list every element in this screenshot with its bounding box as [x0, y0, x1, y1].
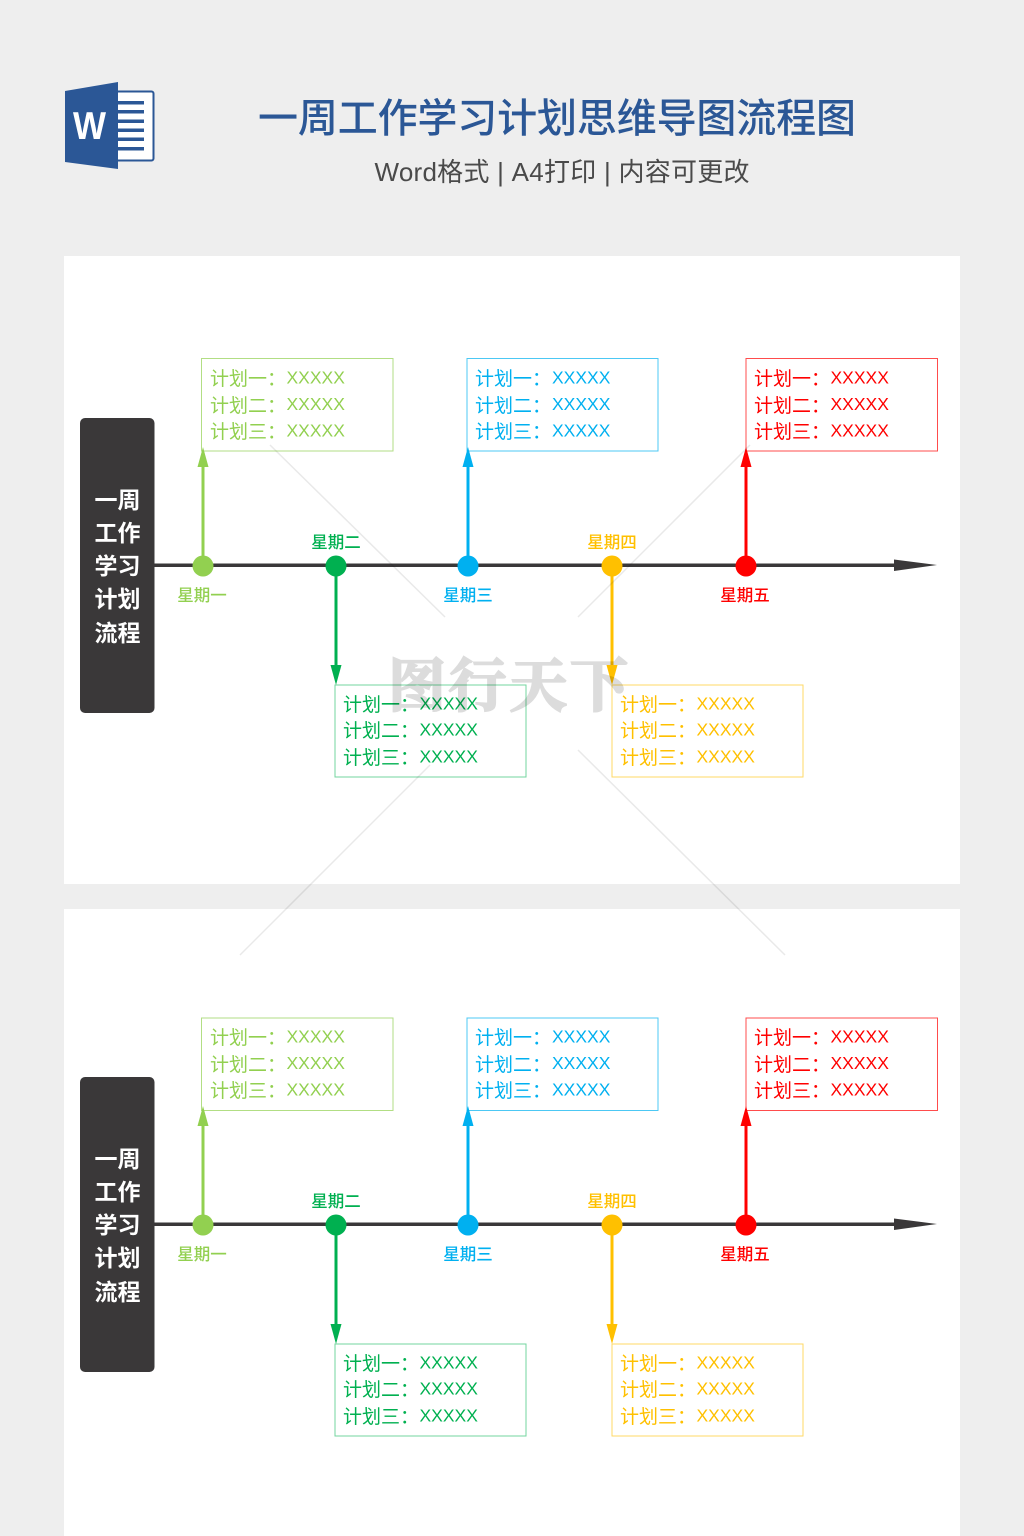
sidebar: first heading block: 工作 [94, 520, 140, 546]
Thursday node with arrow: 星期四 [587, 533, 637, 552]
Wednesday plan box: 计划三： [475, 421, 551, 443]
Friday plan box: XXXXX [830, 368, 889, 388]
Wednesday plan box: XXXXX [552, 394, 611, 414]
second Monday plan box: XXXXX [286, 1080, 345, 1100]
second Thursday plan box: 计划二： [620, 1379, 696, 1401]
icon: Word logo [65, 82, 154, 169]
second Wednesday plan box: XXXXX [552, 1026, 611, 1046]
second Friday plan box: XXXXX [830, 1053, 889, 1073]
sidebar: second heading block: 工作 [94, 1179, 140, 1205]
Thursday plan box: 计划三： [620, 747, 696, 769]
Friday plan box: XXXXX [830, 420, 889, 440]
Wednesday node with arrow: 星期三 [443, 586, 493, 605]
sidebar: first heading block: 计划 [94, 586, 140, 612]
Monday plan box: XXXXX [286, 394, 345, 414]
Friday node with arrow: 星期五 [720, 586, 770, 605]
second Wednesday plan box: 计划二： [475, 1054, 551, 1076]
second Thursday plan box [612, 1344, 803, 1436]
second Friday plan box: 计划一： [754, 1027, 830, 1049]
second Friday node with arrow: 星期五 [720, 1245, 770, 1264]
Friday node with arrow [720, 447, 770, 605]
Thursday plan box: 计划二： [620, 720, 696, 742]
watermark [240, 445, 785, 955]
Wednesday plan box: XXXXX [552, 368, 611, 388]
Wednesday plan box [467, 358, 658, 451]
Tuesday plan box: XXXXX [420, 694, 478, 714]
sidebar: first heading block [80, 418, 154, 713]
sidebar: first heading block: 一周 [94, 487, 140, 513]
second Monday plan box: 计划二： [210, 1054, 286, 1076]
second Monday node with arrow [177, 1106, 227, 1264]
Friday plan box: 计划二： [754, 395, 830, 417]
second Monday plan box [202, 1018, 393, 1110]
second Thursday node with arrow: 星期四 [587, 1192, 637, 1211]
Friday plan box: 计划三： [754, 421, 830, 443]
sidebar: second heading block: 一周 [94, 1146, 140, 1172]
second Wednesday plan box: XXXXX [552, 1080, 611, 1100]
Thursday plan box: XXXXX [696, 746, 755, 766]
Friday plan box [746, 358, 938, 451]
Tuesday plan box: 计划三： [343, 747, 419, 769]
second Monday plan box: 计划三： [210, 1080, 286, 1102]
second Wednesday node with arrow: 星期三 [443, 1245, 493, 1264]
second Tuesday node with arrow [311, 1192, 361, 1344]
Tuesday plan box: XXXXX [420, 746, 478, 766]
Thursday plan box: XXXXX [696, 694, 755, 714]
Thursday node with arrow [587, 533, 637, 685]
Monday plan box: XXXXX [286, 420, 345, 440]
sidebar: second heading block [80, 1077, 154, 1372]
Tuesday plan box: 计划二： [343, 720, 419, 742]
second Monday node with arrow: 星期一 [177, 1245, 227, 1264]
Thursday plan box [612, 685, 803, 777]
panel: first flowchart [64, 256, 960, 884]
second Wednesday plan box: 计划一： [475, 1027, 551, 1049]
Friday plan box: XXXXX [830, 394, 889, 414]
sidebar: first heading block: 学习 [94, 553, 140, 579]
second Monday plan box: 计划一： [210, 1027, 286, 1049]
second Friday plan box: XXXXX [830, 1026, 889, 1046]
second Wednesday node with arrow [443, 1106, 493, 1264]
second Wednesday plan box [467, 1018, 658, 1110]
second Tuesday plan box: XXXXX [420, 1406, 478, 1426]
second Wednesday plan box: XXXXX [552, 1053, 611, 1073]
Wednesday node with arrow [443, 447, 493, 605]
second Tuesday plan box [335, 1344, 526, 1436]
panel: second flowchart [64, 909, 960, 1536]
second Thursday plan box: 计划三： [620, 1406, 696, 1428]
second Wednesday plan box: 计划三： [475, 1080, 551, 1102]
timeline arrow [154, 560, 937, 571]
Monday plan box: XXXXX [286, 368, 345, 388]
watermark: 图行天下 [388, 639, 629, 723]
sidebar: second heading block: 学习 [94, 1212, 140, 1238]
Monday node with arrow: 星期一 [177, 586, 227, 605]
Tuesday plan box: XXXXX [420, 720, 478, 740]
sidebar: first heading block: 流程 [94, 620, 140, 646]
Tuesday plan box [335, 685, 526, 777]
second Monday plan box: XXXXX [286, 1026, 345, 1046]
second Thursday plan box: XXXXX [696, 1352, 755, 1372]
second Friday plan box: XXXXX [830, 1080, 889, 1100]
subtitle: Word格式 | A4打印 | 内容可更改 [374, 157, 750, 187]
Wednesday plan box: XXXXX [552, 420, 611, 440]
Monday plan box: 计划三： [210, 421, 286, 443]
second Monday plan box: XXXXX [286, 1053, 345, 1073]
second Thursday plan box: XXXXX [696, 1406, 755, 1426]
Tuesday plan box: 计划一： [343, 694, 419, 716]
second Tuesday plan box: XXXXX [420, 1378, 478, 1398]
second Friday plan box [746, 1018, 938, 1110]
second Tuesday plan box: XXXXX [420, 1352, 478, 1372]
Wednesday plan box: 计划一： [475, 368, 551, 390]
Monday node with arrow [177, 447, 227, 605]
second Tuesday node with arrow: 星期二 [311, 1192, 361, 1211]
icon: Word logo: W [73, 105, 106, 148]
second Friday node with arrow [720, 1106, 770, 1264]
Thursday plan box: 计划一： [620, 694, 696, 716]
Tuesday node with arrow [311, 533, 361, 685]
sidebar: second heading block: 流程 [94, 1279, 140, 1305]
Monday plan box: 计划一： [210, 368, 286, 390]
second Friday plan box: 计划二： [754, 1054, 830, 1076]
second Tuesday plan box: 计划二： [343, 1379, 419, 1401]
Tuesday node with arrow: 星期二 [311, 533, 361, 552]
second Thursday node with arrow [587, 1192, 637, 1344]
Monday plan box [202, 358, 393, 451]
second Tuesday plan box: 计划三： [343, 1406, 419, 1428]
Friday plan box: 计划一： [754, 368, 830, 390]
sidebar: second heading block: 计划 [94, 1245, 140, 1271]
second Thursday plan box: XXXXX [696, 1378, 755, 1398]
second Friday plan box: 计划三： [754, 1080, 830, 1102]
Wednesday plan box: 计划二： [475, 395, 551, 417]
Thursday plan box: XXXXX [696, 720, 755, 740]
Monday plan box: 计划二： [210, 395, 286, 417]
second Tuesday plan box: 计划一： [343, 1353, 419, 1375]
title: 一周工作学习计划思维导图流程图 [258, 97, 856, 141]
second timeline arrow [154, 1218, 937, 1230]
second Thursday plan box: 计划一： [620, 1353, 696, 1375]
